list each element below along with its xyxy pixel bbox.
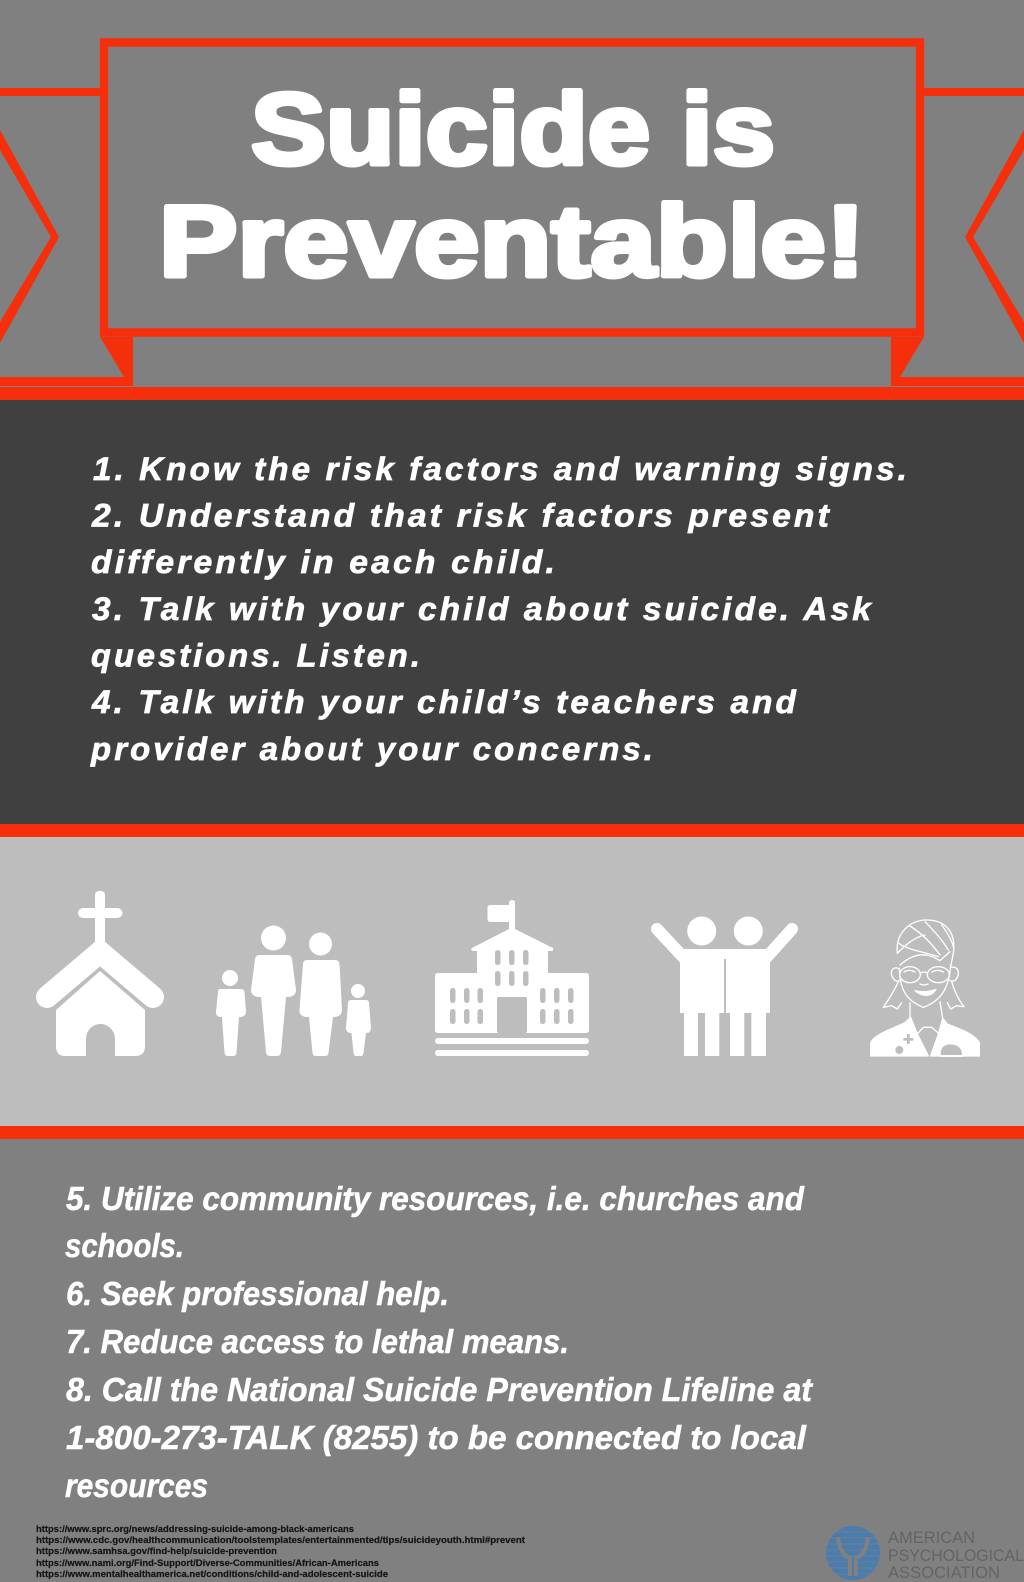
text block: steps 1 to 4: 3. Talk with your child about suicide. Ask [92, 591, 874, 627]
panel: steps 1 to 4 [0, 400, 1024, 824]
text block: steps 1 to 4: 2. Understand that risk factors present [91, 498, 832, 534]
red divider [0, 1126, 1024, 1139]
text block: steps 5 to 8: schools. [65, 1227, 184, 1264]
source links: https://www.sprc.org/news/addressing-suicide-among-black-americans [36, 1524, 354, 1535]
ribbon: left tail [0, 88, 133, 386]
panel: steps 5 to 8 [0, 1139, 1024, 1582]
text block: steps 5 to 8 [65, 1180, 814, 1504]
banner frame [104, 42, 920, 332]
text block: steps 1 to 4: 1. Know the risk factors and warning signs. [93, 451, 910, 487]
text block: steps 5 to 8: 8. Call the National Suicide Prevention Lifeline at [66, 1371, 814, 1408]
logo: American Psychological Association: ASSOCIATION [888, 1564, 1000, 1582]
text block: steps 5 to 8: 6. Seek professional help. [66, 1275, 449, 1312]
source links [36, 1524, 526, 1580]
icon: friends with raised arms [657, 916, 792, 1056]
source links: https://www.cdc.gov/healthcommunication/toolstemplates/entertainmented/tips/suicideyouth.html#prevent [36, 1535, 526, 1546]
source links: https://www.nami.org/Find-Support/Diverse-Communities/African-Americans [36, 1558, 379, 1569]
title [159, 74, 865, 298]
ribbon: right tail [891, 88, 1024, 386]
icon: school [435, 900, 589, 1056]
logo: American Psychological Association: AMERICAN [888, 1529, 975, 1547]
source links: https://www.mentalhealthamerica.net/conditions/child-and-adolescent-suicide [36, 1569, 388, 1580]
icon: doctor [871, 920, 979, 1056]
text block: steps 5 to 8: 5. Utilize community resources, i.e. churches and [66, 1180, 805, 1217]
red divider [0, 824, 1024, 837]
panel: community icons [0, 837, 1024, 1126]
source links: https://www.samhsa.gov/find-help/suicide-prevention [36, 1546, 277, 1557]
title: Preventable! [159, 186, 865, 298]
icon: church [47, 891, 153, 1056]
text block: steps 1 to 4: differently in each child. [91, 544, 558, 580]
text block: steps 1 to 4: 4. Talk with your child’s teachers and [91, 684, 799, 720]
title: Suicide is [251, 74, 775, 186]
red divider under banner [0, 387, 1024, 400]
logo: American Psychological Association [824, 1526, 1024, 1582]
text block: steps 1 to 4: provider about your concerns. [90, 731, 656, 767]
text block: steps 5 to 8: resources [65, 1467, 208, 1504]
text block: steps 1 to 4: questions. Listen. [91, 638, 423, 674]
panel: header banner [0, 0, 1024, 400]
text block: steps 5 to 8: 1-800-273-TALK (8255) to be connected to local [66, 1419, 807, 1456]
text block: steps 1 to 4 [90, 451, 910, 767]
text block: steps 5 to 8: 7. Reduce access to lethal means. [66, 1323, 569, 1360]
icon: family [216, 926, 371, 1056]
